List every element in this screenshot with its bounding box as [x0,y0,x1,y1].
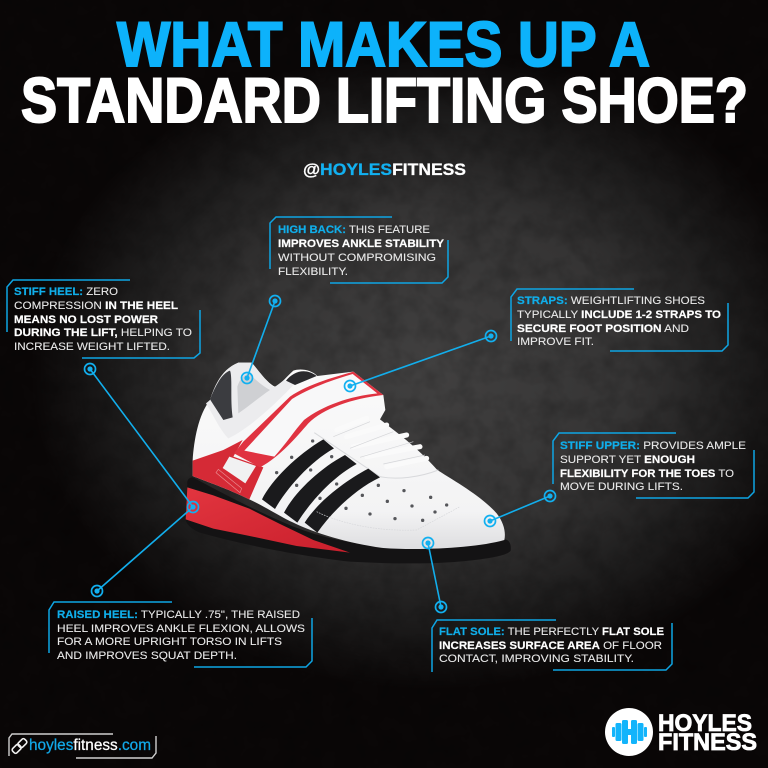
straps text: IMPROVE FIT. [517,336,594,348]
title [21,10,748,136]
stiff upper text: STIFF UPPER: PROVIDES AMPLE [560,440,746,452]
website url: hoylesfitness.com [29,737,151,754]
stiff upper text: FLEXIBILITY FOR THE TOES TO [560,468,734,480]
red wedge heel [186,487,350,553]
website badge [9,734,156,758]
icon: dumbbell [612,720,647,744]
raised heel text: FOR A MORE UPRIGHT TORSO IN LIFTS [57,636,282,648]
high back text: HIGH BACK: THIS FEATURE [278,224,430,236]
tongue top [286,371,317,385]
straps text: SECURE FOOT POSITION AND [517,323,689,335]
straps connector [344,330,496,392]
straps text: STRAPS: WEIGHTLIFTING SHOES [517,295,705,307]
flat sole text [439,626,664,665]
stiff heel frame [7,280,200,358]
stiff upper frame [553,433,754,498]
callout: flat sole [422,538,672,672]
high back text: IMPROVES ANKLE STABILITY [278,238,444,250]
logo [605,708,757,756]
stiff upper text: SUPPORT YET ENOUGH [560,454,695,466]
stiff upper text: MOVE DURING LIFTS. [560,481,683,493]
stiff heel text: DURING THE LIFT, HELPING TO [14,327,192,339]
stiff upper text [560,440,746,493]
raised heel connector [92,502,198,596]
callout: high back [242,217,448,384]
flat sole frame [432,620,672,672]
strap [234,372,383,467]
raised heel frame [49,602,312,667]
perforations [275,439,448,522]
callout: stiff heel [7,280,200,507]
high back frame [270,217,448,283]
eyestay [314,433,438,478]
flat sole text: CONTACT, IMPROVING STABILITY. [439,653,634,665]
icon: link [11,738,28,754]
stiff heel connector [84,364,193,507]
flat sole text: FLAT SOLE: THE PERFECTLY FLAT SOLE [439,626,664,638]
stiff heel text: COMPRESSION IN THE HEEL [14,300,178,312]
toe stitching [317,507,460,530]
flat sole text: INCREASES SURFACE AREA OF FLOOR [439,640,662,652]
three black stripes [262,439,380,533]
social handle: @HOYLESFITNESS [303,160,466,179]
red heel panel [193,440,263,499]
lace shadow details [333,422,425,464]
stiff heel text: MEANS NO LOST POWER [14,314,158,326]
dark heel tab [210,371,233,420]
high back text: WITHOUT COMPROMISING [278,252,436,264]
raised heel text [57,609,305,662]
straps text [517,295,721,348]
website frame [9,734,156,758]
raised heel text: RAISED HEEL: TYPICALLY .75", THE RAISED [57,609,300,621]
shoe illustration [186,363,511,563]
laces [337,418,427,467]
stiff heel text: INCREASE WEIGHT LIFTED. [14,341,170,353]
callout: stiff upper [484,433,754,526]
stiff heel text [14,286,192,353]
stiff upper connector [484,490,556,526]
flat sole connector [422,538,446,612]
shoe upper [193,363,505,549]
raised heel text: HEEL IMPROVES ANKLE FLEXION, ALLOWS [57,623,305,635]
white heel window [223,457,256,483]
heel logo badge [216,469,242,493]
high back text: FLEXIBILITY. [278,266,348,278]
logo wordmark: HOYLES [658,710,752,737]
logo wordmark: FITNESS [658,729,757,756]
logo wordmark [658,710,757,756]
high back text [278,224,444,278]
high back connector [242,296,280,384]
straps frame [511,289,728,351]
callout: raised heel [49,502,312,667]
callout: straps [344,289,728,392]
collar lining [206,363,297,438]
title: WHAT MAKES UP A [117,10,650,80]
raised heel text: AND IMPROVES SQUAT DEPTH. [57,650,237,662]
logo circle [605,708,653,756]
shoe outsole [186,477,511,563]
stiff heel text: STIFF HEEL: ZERO [14,286,118,298]
straps text: TYPICALLY INCLUDE 1-2 STRAPS TO [517,309,721,321]
